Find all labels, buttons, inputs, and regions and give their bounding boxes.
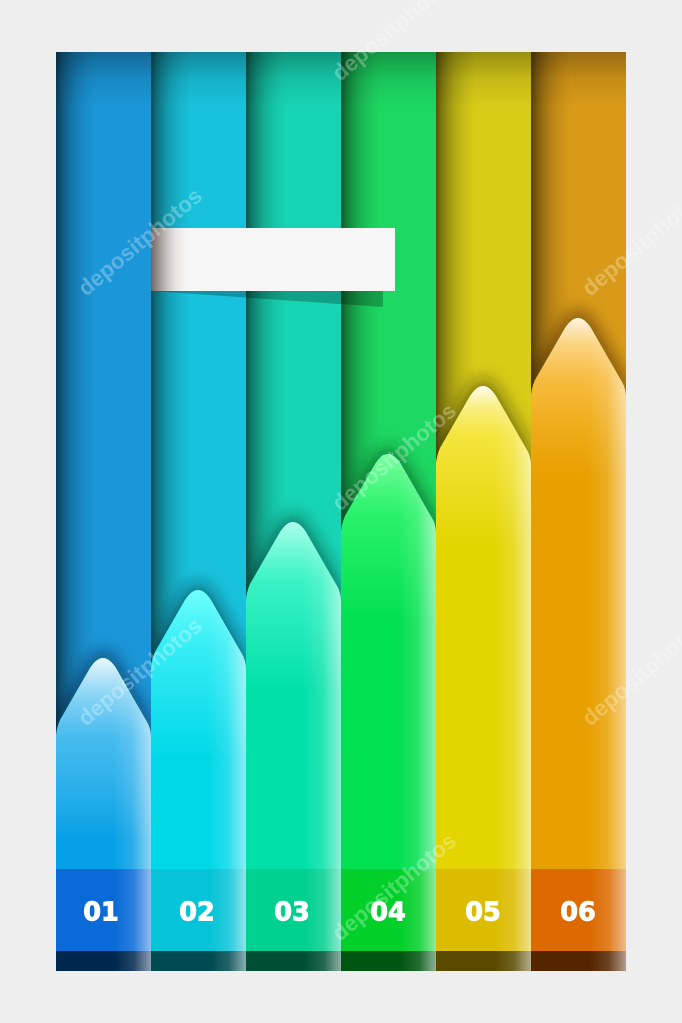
column 4 (341, 52, 436, 971)
step numbers: 01 (83, 898, 119, 928)
column 1 (56, 52, 151, 971)
watermark text: depositphotos (327, 828, 461, 946)
blank title box (151, 228, 395, 291)
column 5 (436, 52, 531, 971)
column 3 (246, 52, 341, 971)
step numbers: 02 (179, 898, 215, 928)
infographic canvas (56, 52, 626, 971)
step numbers: 06 (560, 898, 596, 928)
step numbers: 03 (274, 898, 310, 928)
step numbers: 04 (370, 898, 406, 928)
step numbers: 05 (465, 898, 501, 928)
step numbers (83, 898, 596, 928)
watermark text: depositphotos (73, 613, 207, 731)
watermark text: depositphotos (73, 183, 207, 301)
watermark text: depositphotos (327, 398, 461, 516)
title box shadow (151, 291, 383, 307)
column 2 (151, 52, 246, 971)
column 6 (531, 52, 626, 971)
